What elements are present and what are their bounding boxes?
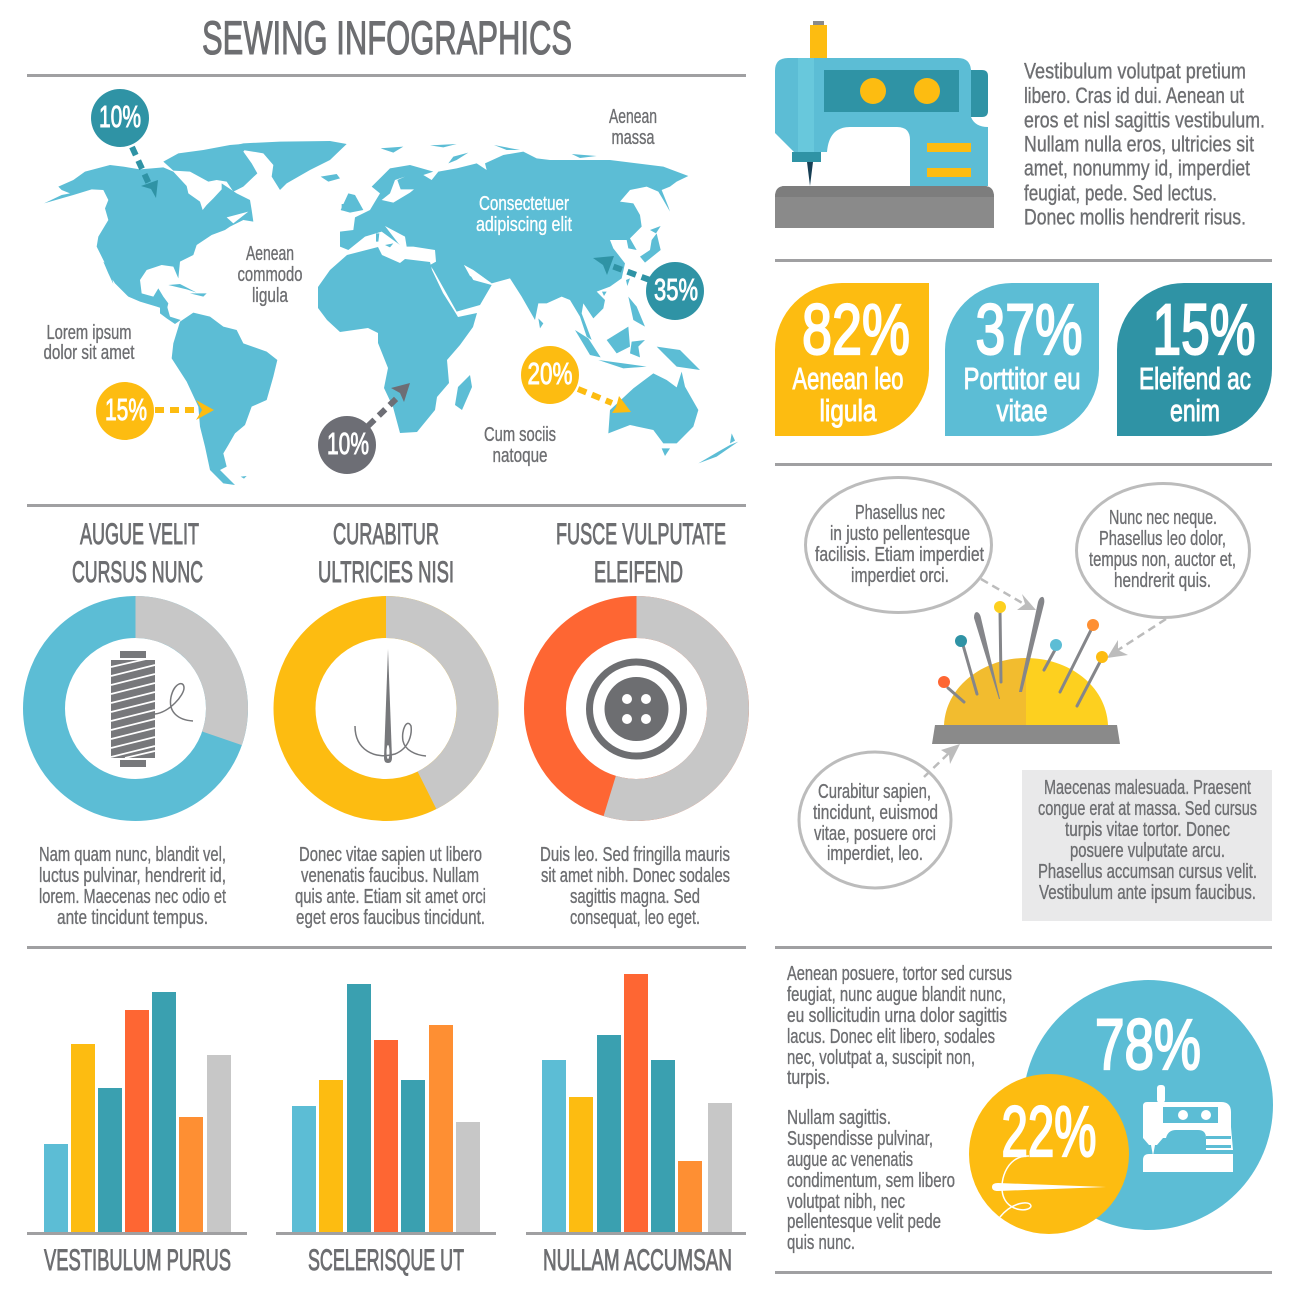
map: asia pacific islands <box>538 226 738 463</box>
panel: gray note: posuere vulputate arcu. <box>1070 840 1225 862</box>
callout bubble: top left: facilisis. Etiam imperdiet <box>815 544 984 566</box>
donut chart: needle <box>294 617 478 800</box>
stat tile: 15% <box>1117 283 1272 436</box>
text block: bottom paragraph two: Suspendisse pulvinar, <box>787 1128 933 1150</box>
heading: Fusce vulputate eleifend <box>556 518 726 589</box>
callout: 10% north america <box>91 89 158 198</box>
callout: 10% africa: 10% <box>327 426 369 461</box>
icon: white sewing machine <box>1143 1085 1233 1172</box>
pins and needles <box>948 610 1101 706</box>
text block: bottom paragraph two: volutpat nibh, nec <box>787 1191 905 1213</box>
heading: Curabitur ultricies nisi <box>318 518 454 589</box>
heading: Augue velit cursus nunc: CURSUS NUNC <box>72 556 203 589</box>
map label: Cum sociis natoque <box>484 424 556 467</box>
text block: bottom paragraph two: Nullam sagittis. <box>787 1107 891 1129</box>
cushion dome <box>944 658 1108 725</box>
text block: thread description <box>39 844 226 929</box>
callout: 15% south america: 15% <box>105 392 147 427</box>
text block: bottom paragraph one: feugiat, nunc augue blandit nunc, <box>787 984 1006 1006</box>
text block: thread description: luctus pulvinar, hendrerit id, <box>39 865 226 887</box>
stat tile: 82% <box>775 283 929 436</box>
map label: Lorem ipsum dolor sit amet: dolor sit amet <box>44 342 135 364</box>
callout: 35% asia: 35% <box>654 272 698 307</box>
icon: presser foot <box>792 152 821 162</box>
arrow: from top-left bubble to needle <box>981 579 1036 610</box>
panel: world map <box>44 89 738 485</box>
stat tile: 15%: enim <box>1170 393 1220 428</box>
chart label: Scelerisque ut: SCELERISQUE UT <box>308 1244 464 1277</box>
text block: thread description: lorem. Maecenas nec odio et <box>39 886 226 908</box>
needle right <box>1019 597 1044 692</box>
callout bubble: top left: Phasellus nec <box>855 502 945 524</box>
heading: Curabitur ultricies nisi: ULTRICIES NISI <box>318 556 454 589</box>
donut chart: button <box>545 617 728 800</box>
chart label: Vestibulum purus: VESTIBULUM PURUS <box>44 1244 231 1277</box>
callout bubble: top left: imperdiet orci. <box>851 565 949 587</box>
panel: gray note <box>1022 770 1272 921</box>
stat circle: 78% <box>1023 980 1273 1230</box>
text block: bottom paragraph two: augue ac venenatis <box>787 1149 913 1171</box>
text block: bottom paragraph one: turpis. <box>787 1067 830 1089</box>
callout bubble: bottom left: imperdiet, leo. <box>827 843 923 865</box>
text block: bottom paragraph two: pellentesque velit pede <box>787 1211 941 1233</box>
text block: bottom paragraph two: quis nunc. <box>787 1232 855 1254</box>
heading: Augue velit cursus nunc: AUGUE VELIT <box>80 518 199 551</box>
stat tile: 37%: vitae <box>996 393 1048 428</box>
icon: needle horizontal <box>992 1183 1106 1191</box>
stat circle: 22% <box>969 1074 1129 1234</box>
icon: thread spool <box>111 651 193 767</box>
map label: Aenean commodo ligula: commodo <box>238 264 302 286</box>
icon: machine handwheel <box>968 70 988 117</box>
stat tile: 15%: 15% <box>1152 291 1256 370</box>
text block: bottom paragraph one: nec, volutpat a, suscipit non, <box>787 1047 975 1069</box>
icon: button <box>590 662 684 756</box>
stat tile: 37%: Porttitor eu <box>964 361 1080 396</box>
text block: bottom paragraph one <box>787 963 1012 1089</box>
callout bubble: top right <box>1076 484 1250 618</box>
arrow: from bottom-left bubble to base <box>924 744 960 777</box>
stat tile: 15%: Eleifend ac <box>1139 361 1251 396</box>
icon: machine strip <box>798 58 814 152</box>
stat tile: 82%: 82% <box>802 291 910 370</box>
text block: needle description: Donec vitae sapien ut libero <box>299 844 482 866</box>
map: africa <box>318 247 477 433</box>
map: americas north <box>44 141 347 310</box>
text block: intro paragraph: feugiat, pede. Sed lectus. <box>1024 180 1217 206</box>
map label: Consectetuer adipiscing elit: Consectetuer <box>479 193 569 215</box>
map label: Consectetuer adipiscing elit <box>476 193 572 236</box>
map label: Aenean commodo ligula <box>238 243 302 307</box>
arrow: from top-right bubble to pin <box>1107 619 1166 658</box>
text block: needle description: venenatis faucibus. Nullam <box>301 865 479 887</box>
text block: needle description: eget eros faucibus tincidunt. <box>296 907 485 929</box>
map label: Lorem ipsum dolor sit amet: Lorem ipsum <box>46 322 132 344</box>
icon: machine indicators <box>927 143 971 177</box>
callout bubble: top right: Nunc nec neque. <box>1109 507 1217 529</box>
callout: 20% australia: 20% <box>528 356 572 391</box>
map label: Aenean commodo ligula: Aenean <box>246 243 294 265</box>
text block: bottom paragraph one: lacus. Donec elit libero, sodales <box>787 1026 995 1048</box>
text block: button description: Duis leo. Sed fringilla mauris <box>540 844 730 866</box>
text block: thread description: ante tincidunt tempus. <box>57 907 208 929</box>
map: central and south america <box>160 303 277 485</box>
panel: gray note: turpis vitae tortor. Donec <box>1065 819 1230 841</box>
callout: 10% north america: 10% <box>99 99 141 134</box>
text block: button description <box>540 844 730 929</box>
callout: 10% africa <box>318 383 410 474</box>
text block: button description: consequat, leo eget. <box>570 907 700 929</box>
map label: Cum sociis natoque: natoque <box>492 445 548 467</box>
callout bubble: top left <box>806 478 992 612</box>
chart label: Nullam accumsan: NULLAM ACCUMSAN <box>543 1244 732 1277</box>
icon: needle and thread <box>355 649 426 763</box>
bar chart: Scelerisque ut <box>276 984 496 1235</box>
text block: button description: sit amet nibh. Donec sodales <box>541 865 730 887</box>
text block: bottom paragraph one: Aenean posuere, tortor sed cursus <box>787 963 1012 985</box>
icon: thread curve <box>1000 1156 1031 1217</box>
map label: Aenean massa: Aenean <box>609 106 657 128</box>
stat tile: 82%: Aenean leo <box>792 361 904 396</box>
stat tile: 37% <box>945 283 1099 436</box>
map: eurasia <box>340 144 688 340</box>
stat tile: 82%: ligula <box>820 393 877 428</box>
map label: Aenean commodo ligula: ligula <box>252 285 289 307</box>
heading: Augue velit cursus nunc <box>72 518 203 589</box>
callout bubble: top right: tempus non, auctor et, <box>1089 549 1236 571</box>
icon: needle <box>807 162 813 186</box>
map label: Aenean massa <box>609 106 657 149</box>
map label: Aenean massa: massa <box>612 127 655 149</box>
bar chart: Nullam accumsan <box>526 974 746 1235</box>
heading: Fusce vulputate eleifend: FUSCE VULPUTATE <box>556 518 726 551</box>
callout bubble: top right: Phasellus leo dolor, <box>1099 528 1226 550</box>
callout bubble: bottom left: tincidunt, euismod <box>813 802 938 824</box>
title: SEWING INFOGRAPHICS <box>202 11 572 64</box>
heading: Fusce vulputate eleifend: ELEIFEND <box>594 556 683 589</box>
text block: bottom paragraph one: eu sollicitudin urna dolor sagittis <box>787 1005 1007 1027</box>
text block: needle description: quis ante. Etiam sit amet orci <box>295 886 486 908</box>
callout: 20% australia <box>521 346 631 413</box>
callout bubble: top left: in justo pellentesque <box>830 523 970 545</box>
icon: machine panel <box>824 70 959 112</box>
callout bubble: bottom left: vitae, posuere orci <box>814 823 936 845</box>
text block: intro paragraph: libero. Cras id dui. Aenean ut <box>1024 83 1244 108</box>
icon: machine knobs <box>860 78 940 104</box>
callout: 35% asia <box>593 256 704 320</box>
callout bubble: bottom left: Curabitur sapien, <box>818 781 931 803</box>
icon: spool on machine <box>810 21 827 59</box>
cushion base <box>932 725 1120 744</box>
text block: button description: sagittis magna. Sed <box>570 886 700 908</box>
map label: Consectetuer adipiscing elit: adipiscing elit <box>476 214 572 236</box>
callout bubble: top right: hendrerit quis. <box>1114 570 1211 592</box>
heading: Curabitur ultricies nisi: CURABITUR <box>333 518 439 551</box>
map label: Lorem ipsum dolor sit amet <box>44 322 135 364</box>
text block: thread description: Nam quam nunc, blandit vel, <box>39 844 226 866</box>
icon: pincushion <box>932 597 1120 744</box>
text block: intro paragraph: Vestibulum volutpat pretium <box>1024 58 1246 84</box>
map label: Cum sociis natoque: Cum sociis <box>484 424 556 446</box>
text block: bottom paragraph two: condimentum, sem libero <box>787 1170 955 1192</box>
icon: machine base <box>775 186 994 228</box>
text block: intro paragraph: Donec mollis hendrerit risus. <box>1024 204 1246 230</box>
stat circle: 22%: 22% <box>1002 1093 1096 1172</box>
panel: sewing machine illustration <box>775 21 994 228</box>
icon: machine body <box>775 58 988 186</box>
donut chart: thread <box>44 617 227 800</box>
needle left <box>974 612 1000 699</box>
pin heads <box>938 601 1108 688</box>
callout bubble: bottom left <box>799 752 951 888</box>
text block: intro paragraph <box>1024 58 1265 230</box>
stat tile: 37%: 37% <box>976 291 1082 370</box>
callout: 15% south america <box>96 382 214 440</box>
stat circle: 78%: 78% <box>1095 1006 1201 1085</box>
text block: bottom paragraph two <box>787 1107 955 1254</box>
bar chart: Vestibulum purus <box>27 992 247 1235</box>
map: madagascar <box>455 375 472 410</box>
text block: needle description <box>295 844 486 929</box>
